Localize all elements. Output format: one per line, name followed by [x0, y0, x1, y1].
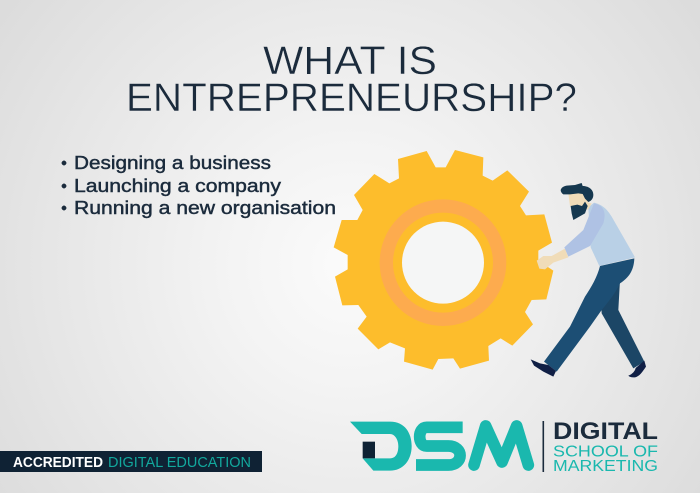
bullet list	[62, 152, 336, 218]
back shoe	[628, 361, 646, 377]
back leg	[600, 280, 644, 368]
title	[126, 39, 577, 120]
icon: gear	[334, 150, 553, 370]
face	[568, 191, 589, 209]
logo: DSM	[350, 418, 658, 475]
logo mark	[350, 422, 528, 471]
illustration: man pushing gear	[531, 183, 646, 377]
logo: DSM: DIGITAL	[553, 418, 658, 445]
bullet list: Running a new organisation	[74, 197, 336, 218]
neck	[583, 202, 592, 210]
title: WHAT IS	[263, 39, 437, 83]
banner: accredited digital education: DIGITAL EDUCATION	[108, 455, 251, 471]
sleeve	[564, 203, 605, 257]
bullet list: Designing a business	[74, 152, 271, 173]
torso	[588, 203, 635, 266]
hair	[561, 183, 593, 202]
title: ENTREPRENEURSHIP?	[126, 76, 577, 120]
bullet list: Launching a company	[74, 175, 282, 196]
banner: accredited digital education: ACCREDITED	[13, 455, 103, 471]
logo: DSM: SCHOOL OF	[553, 444, 658, 460]
beard	[571, 202, 588, 220]
hand and forearm	[537, 249, 568, 269]
logo: DSM: MARKETING	[553, 458, 658, 475]
front shoe	[531, 359, 556, 377]
banner: accredited digital education	[0, 451, 262, 472]
front leg and hips	[544, 258, 634, 372]
